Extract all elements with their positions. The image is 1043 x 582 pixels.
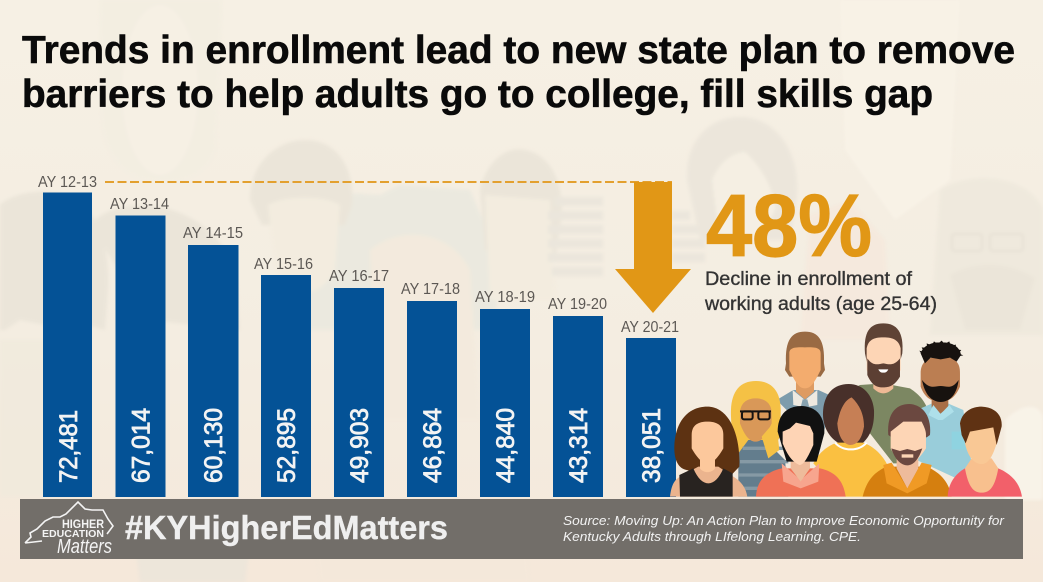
bearded man in green shirt: [850, 323, 927, 463]
bar AY 19-20: AY 19-20: [548, 296, 607, 313]
stat description: Decline in enrollment of: [705, 269, 913, 290]
bar AY 15-16: AY 15-16: [254, 256, 313, 273]
bar AY 14-15: AY 14-15: [183, 225, 243, 242]
title: Trends in enrollment lead to new state plan to remove: [22, 29, 1015, 72]
woman with blonde hair and glasses: [731, 381, 788, 497]
title: [22, 29, 1015, 116]
bar AY 12-13: [38, 174, 97, 497]
source note: [563, 514, 1005, 544]
bar AY 17-18: 46,864: [419, 408, 447, 483]
man with curly hair and blue shirt: [917, 341, 972, 480]
bar AY 17-18: [401, 281, 460, 497]
bar AY 14-15: 60,130: [200, 408, 228, 483]
illustration: group of adults: [670, 323, 1022, 497]
footer band: [20, 499, 1023, 559]
source note: Kentucky Adults through LIfelong Learning. CPE.: [563, 530, 861, 544]
man with goatee and orange shirt: [863, 404, 952, 497]
bar AY 17-18: AY 17-18: [401, 281, 460, 298]
bar AY 20-21: AY 20-21: [621, 319, 679, 336]
stat: 48 percent: 48%: [706, 176, 872, 275]
bar AY 13-14: [110, 196, 169, 497]
bar AY 16-17: 49,903: [346, 408, 374, 483]
bar AY 18-19: AY 18-19: [475, 289, 535, 306]
stat description: working adults (age 25-64): [704, 294, 937, 315]
bar AY 20-21: [621, 319, 679, 497]
woman with dark hair and yellow sweater: [813, 384, 888, 497]
bar chart: enrollment by academic year: [38, 174, 679, 497]
bar AY 18-19: [475, 289, 535, 497]
logo: Higher Education Matters: HIGHER: [62, 519, 105, 531]
bar AY 18-19: 44,840: [492, 408, 520, 483]
hashtag: #KYHigherEdMatters: [125, 509, 448, 546]
logo: Higher Education Matters: [25, 502, 113, 558]
bar AY 15-16: 52,895: [273, 408, 301, 483]
bar AY 19-20: [548, 296, 607, 497]
dashed reference line: [105, 181, 672, 183]
bar AY 20-21: 38,051: [638, 408, 666, 483]
logo: Higher Education Matters: Matters: [57, 536, 112, 558]
bar AY 13-14: AY 13-14: [110, 196, 169, 213]
bar AY 13-14: 67,014: [128, 408, 156, 483]
bar AY 14-15: [183, 225, 243, 497]
logo: Higher Education Matters: EDUCATION: [42, 528, 104, 540]
title: barriers to help adults go to college, fill skills gap: [22, 73, 933, 116]
bar AY 19-20: 43,314: [565, 408, 593, 483]
bar AY 12-13: 72,481: [55, 410, 83, 483]
woman with long brown hair: [670, 407, 747, 497]
woman with short hair and pink top: [948, 407, 1022, 497]
bar AY 12-13: AY 12-13: [38, 174, 97, 191]
man with black hair and coral shirt: [756, 406, 846, 497]
man in blue shirt, back row: [777, 332, 829, 450]
bar AY 15-16: [254, 256, 313, 497]
source note: Source: Moving Up: An Action Plan to Improve Economic Opportunity for: [563, 514, 1005, 528]
stat description: [704, 269, 937, 315]
bar AY 16-17: AY 16-17: [329, 268, 389, 285]
bar AY 16-17: [329, 268, 389, 497]
arrow: decline: [615, 182, 691, 313]
